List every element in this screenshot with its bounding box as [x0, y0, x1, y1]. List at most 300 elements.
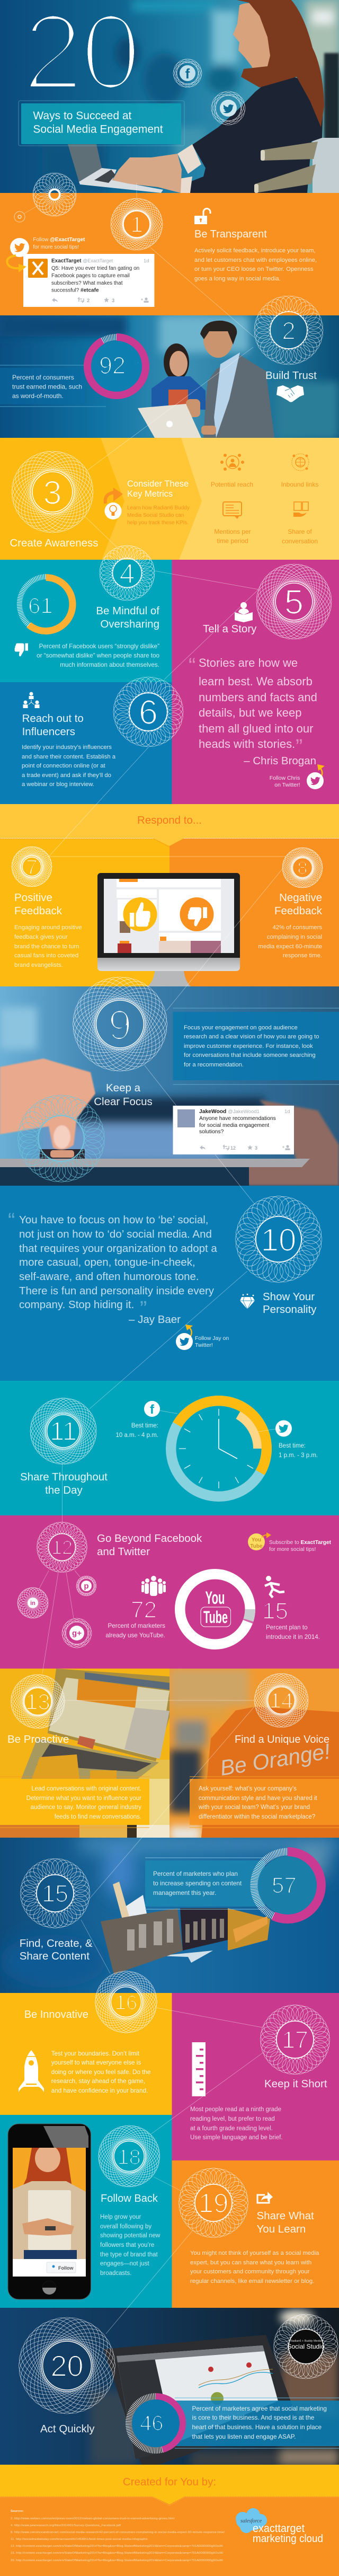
quote: chris brogan: Stories are how we — [199, 656, 298, 669]
tweet actions: 3 — [112, 298, 114, 304]
rosette number 7: 7 — [26, 857, 38, 879]
sources list: Sources: — [11, 2510, 24, 2513]
rosette number 4: 4 — [120, 559, 135, 589]
avatar: exacttarget — [28, 259, 48, 278]
tweet actions — [52, 297, 148, 304]
text box: content management: Percent of marketers who plan — [153, 1870, 238, 1877]
stat: 15%: introduce it in 2014. — [266, 1634, 320, 1640]
text box: focus body — [173, 1008, 339, 1084]
text: be transparent body: Actively solicit feedback, introduce your team, — [194, 248, 316, 254]
quote: chris brogan: details, but we keep — [199, 706, 301, 719]
text: share what you learn body: your customers and community through your — [190, 2269, 310, 2275]
text: positive feedback body: feedback gives your — [14, 934, 68, 940]
photo: blurred background — [0, 1007, 339, 1188]
rosette number 1: 1 — [130, 212, 143, 237]
text: percent of facebook users: much information about themselves. — [60, 661, 159, 668]
tweet text: for social media engagement — [199, 1123, 269, 1128]
connector lines between numbered rosettes — [39, 183, 286, 2334]
text: negative feedback body: complaining in social — [267, 934, 322, 940]
logo: salesforce exacttarget marketing cloud — [236, 2508, 323, 2545]
heading: find a unique voice: Find a Unique Voice — [235, 1734, 329, 1745]
rosette number 18: 18 — [117, 2146, 141, 2169]
quote: jay baer: not just on how to ‘do’ social media. And — [19, 1228, 212, 1240]
icon: thumbs down — [15, 643, 28, 656]
stat: 72%: already use YouTube. — [105, 1632, 165, 1639]
text: keep it short body: Use simple language and be brief. — [190, 2134, 283, 2141]
photo: right hand — [238, 1100, 339, 1186]
sources list: 11. http://socialmediatoday.com/briannasmith/1453951/best-times-post-social-media-infographic — [11, 2538, 148, 2541]
photo: hands on keyboard — [112, 154, 182, 193]
heading: share what you learn: Share What — [256, 2210, 314, 2222]
text box: unique voice body — [190, 1777, 339, 1828]
quote: chris brogan: them all glued into our — [199, 722, 313, 735]
clock chart: best times — [171, 1401, 266, 1496]
callout: subscribe on youtube — [248, 1532, 332, 1552]
metric: share of conversation — [282, 502, 318, 545]
monitor with facebook page — [97, 873, 240, 986]
text: learn how radian6: Learn how Radian6 Buddy — [127, 505, 190, 511]
rosette: around finger — [11, 1088, 112, 1189]
title text: Ways to Succeed at — [33, 110, 131, 122]
quote: jay baer: self-aware, and often humorous tone. — [19, 1271, 199, 1283]
text: follow back body: broadcasts. — [100, 2270, 131, 2277]
rosette number 1 — [101, 188, 173, 260]
rosette number 8 — [274, 840, 331, 896]
photo: hands — [186, 399, 216, 435]
text: learn how radian6: Media Social Studio can — [127, 513, 184, 518]
rosette number 5 — [242, 549, 339, 654]
tweet text: 1d — [144, 258, 149, 264]
text box: social marketing: Percent of marketers agree that social marketing — [192, 2405, 327, 2412]
text: percent of facebook users: Percent of Facebook users “strongly dislike” — [39, 643, 159, 650]
rosette number 3: 3 — [43, 474, 62, 511]
text box: unique voice body: with your social team? What’s your brand — [198, 1804, 310, 1811]
icon: rocket — [19, 2050, 44, 2092]
text box: be proactive body: Lead conversations with original content. — [31, 1786, 141, 1792]
decorative flower rosette — [14, 171, 78, 222]
tweet card: exacttarget — [23, 254, 154, 307]
heading: reach out to influencers: Influencers — [22, 726, 75, 738]
tweet text — [199, 1109, 290, 1135]
rosette number 14: 14 — [270, 1689, 293, 1713]
rosette number 19: 19 — [199, 2188, 228, 2218]
panel: respond to banner and feedback — [0, 804, 339, 986]
logo: salesforce exacttarget marketing cloud: marketing cloud — [253, 2533, 323, 2545]
text box: focus body: research and a clear vision of how you are going to — [184, 1034, 319, 1040]
phone follow bar: Follow — [58, 2265, 74, 2271]
photo: desk — [79, 1760, 170, 1838]
heading: build trust: Build Trust — [265, 369, 317, 382]
quote: jay baer: company. Stop hiding it. — [19, 1299, 134, 1311]
follow on twitter callout: Follow @ExactTarget — [33, 237, 85, 243]
sources list: 20. http://content.exacttarget.com/en/StateOfMarketing2014?ts=Blog&ss=Blog.StateofMarketing2014&lsm=Corporate&camp=701A0000000g9OuIAI — [11, 2559, 223, 2562]
rosette number 17 — [254, 1999, 336, 2080]
tweet card: jakewood — [173, 1106, 294, 1154]
heading: keep a clear focus: Clear Focus — [94, 1096, 153, 1108]
text box: focus body: for conversations that include someone searching — [184, 1052, 316, 1058]
panel: 14 find a unique voice — [170, 1663, 339, 1842]
photo: woman's jacket — [190, 76, 323, 193]
photo: woman's face — [233, 3, 270, 87]
sources list: 15. http://content.exacttarget.com/en/StateOfMarketing2014?ts=Blog&ss=Blog.StateofMarketing2014&lsm=Corporate&camp=701A0000000g9OuIAI — [11, 2552, 223, 2555]
attribution: jay baer: – Jay Baer — [129, 1313, 181, 1326]
heading: go beyond facebook and twitter: and Twitter — [97, 1546, 150, 1558]
icon: google plus rosette: g+ — [72, 1629, 82, 1638]
heading: be transparent: Be Transparent — [194, 228, 267, 240]
photo: man's suit — [203, 355, 274, 438]
photo: blurred background — [0, 1838, 339, 1988]
rosette number 10: 10 — [261, 1222, 296, 1258]
clock ticks and hands — [179, 1409, 253, 1488]
tweet text: JakeWood @JakeWood1 — [199, 1109, 260, 1115]
text: be transparent body: and let customers chat with employees online, — [194, 257, 317, 263]
donut chart: 46% — [129, 2396, 183, 2450]
metric: mentions per time period: Mentions per — [214, 528, 251, 535]
photo: blurred interior — [170, 1669, 249, 1842]
text: be transparent body: goes a long way in social media. — [194, 276, 281, 282]
follow chris on twitter: on Twitter! — [274, 782, 300, 788]
callout: facebook best time — [115, 1401, 177, 1439]
panel: 13 be proactive — [0, 1664, 170, 1838]
panel: 10 show your personality — [0, 1186, 339, 1381]
stat: 72% — [105, 1597, 166, 1639]
rosette number 5: 5 — [284, 583, 304, 621]
donut chart: 57% — [254, 1852, 321, 1919]
chevron: middle layer — [101, 438, 339, 560]
icon: diamond — [240, 1294, 255, 1309]
quote: chris brogan: learn best. We absorb — [199, 675, 313, 688]
text: negative feedback body: response time. — [283, 952, 322, 959]
heading: tell a story: Tell a Story — [203, 623, 257, 635]
text box: be proactive body: feeds to find new conversations. — [55, 1814, 141, 1820]
icon: linkedin rosette: in — [30, 1600, 35, 1607]
callout: facebook best time: f — [150, 1402, 155, 1417]
rosette: social studio: Radian6 + Buddy Media — [290, 2340, 322, 2343]
text: be innovative body: doing or where you feel safe. Do the — [51, 2069, 150, 2076]
text: follow back body: Help grow your — [100, 2214, 141, 2220]
rosette number 15: 15 — [42, 1880, 68, 1907]
youtube logo: You — [206, 1588, 225, 1608]
quote: chris brogan — [189, 654, 317, 758]
text: keep it short body: Most people read at a ninth grade — [190, 2106, 281, 2113]
heading: be innovative: Be Innovative — [24, 2009, 88, 2021]
donut chart: 92%: % — [127, 353, 139, 369]
text: be innovative body: Test your boundaries. Don’t limit — [51, 2050, 139, 2057]
sources list: 12. http://content.exacttarget.com/en/StateOfMarketing2014?ts=Blog&ss=Blog.StateofMarketing2014&lsm=Corporate&camp=701A0000000g9OuIAI — [11, 2545, 223, 2548]
follow chris on twitter: Follow Chris — [270, 775, 300, 781]
title text: Social Media Engagement — [33, 123, 163, 136]
follow jay on twitter — [176, 1333, 229, 1350]
photo: woman's head — [164, 343, 189, 381]
photo: woman's blazer — [151, 376, 206, 410]
tweet text: solutions? — [199, 1129, 224, 1135]
panel: hero photo header — [0, 0, 339, 193]
stat: 15%: 15 — [262, 1598, 288, 1624]
follow chris on twitter — [270, 772, 324, 789]
heading: go beyond facebook and twitter: Go Beyond Facebook — [97, 1532, 202, 1545]
donut chart: 92%: 92 — [99, 352, 126, 379]
stat: 72%: 72 — [131, 1597, 157, 1623]
metric: inbound links: Inbound links — [281, 481, 318, 488]
icon: linkedin rosette — [16, 1586, 49, 1619]
text box: be proactive body: audience to say. Monitor general industry — [31, 1804, 141, 1811]
photo: laptop keyboard and hands — [21, 1739, 159, 1781]
icon: thumbs down circle — [180, 897, 214, 931]
photo: sweater cuffs — [177, 144, 201, 193]
text box: be proactive body — [0, 1777, 149, 1828]
rosette number 9 — [55, 958, 185, 1090]
text: be innovative body: research, stay ahead of the game, — [51, 2078, 145, 2085]
quote: jay baer — [8, 1209, 217, 1320]
text box: focus body: improve customer experience. For instance, look — [184, 1043, 313, 1049]
metric: potential reach: Potential reach — [211, 481, 253, 488]
callout: subscribe on youtube: for more social tips! — [269, 1547, 316, 1552]
chevron: key metrics layer — [179, 438, 339, 560]
tweet text: Anyone have recommendations — [199, 1116, 276, 1122]
heading: keep it short: Keep it Short — [264, 2078, 327, 2090]
rosette number 6 — [108, 671, 189, 753]
heading: act quickly: Act Quickly — [40, 2423, 95, 2435]
panel: 20 act quickly — [0, 2298, 339, 2470]
panel: 12 go beyond facebook and twitter — [0, 1515, 339, 1669]
rosette number 20: 20 — [50, 2349, 84, 2383]
tweet text — [51, 258, 149, 294]
icon: ruler — [192, 2042, 206, 2096]
text box: social marketing: that lets you listen and engage ASAP. — [192, 2433, 296, 2440]
text: share what you learn body: You might not think of yourself as a social media — [190, 2250, 319, 2256]
heading: negative feedback: Negative — [279, 892, 322, 904]
logo: salesforce exacttarget marketing cloud: exacttarget — [253, 2522, 305, 2535]
banner: respond to: Respond to... — [137, 814, 202, 826]
rosette number 2: 2 — [282, 317, 296, 345]
metric: share of conversation: Share of — [288, 528, 312, 535]
rosette number 16 — [83, 1959, 169, 2045]
donut chart: 61%: % — [53, 595, 64, 609]
heading: follow back: Follow Back — [101, 2193, 158, 2204]
stat: 72%: Percent of marketers — [108, 1622, 165, 1629]
text: be innovative body: yourself to what everyone else is — [51, 2059, 141, 2066]
rosette number 14 — [244, 1663, 319, 1738]
icon: influencer network — [23, 692, 39, 708]
quote: jay baer: that requires your organization to adopt a — [19, 1242, 217, 1255]
text box: be proactive body: Determine what you want to influence your — [26, 1795, 141, 1802]
panel: 6 reach out to influencers — [0, 671, 189, 804]
metric: mentions per time period: time period — [217, 537, 248, 545]
tweet actions: 2 — [87, 298, 90, 304]
arrow: yellow curved to tweet — [7, 255, 26, 272]
quote: jay baer: ” — [140, 1297, 147, 1320]
text box: social marketing — [175, 2398, 339, 2448]
rosette number 10 — [228, 1189, 329, 1290]
stat: 15%: Percent plan to — [266, 1624, 308, 1631]
callout: subscribe on youtube: You — [252, 1537, 261, 1543]
icon: light bulb — [105, 502, 122, 519]
text box: focus body: Focus your engagement on good audience — [184, 1025, 298, 1031]
heading: show your personality: Show Your — [263, 1291, 315, 1303]
arrow: yellow curved up — [317, 764, 325, 777]
text: influencers body: point of connection online (or at — [22, 763, 105, 769]
phone follow bar — [13, 2259, 86, 2277]
rosette number 6: 6 — [139, 693, 158, 731]
quote: jay baer: more casual, open, tongue-in-cheek, — [19, 1256, 195, 1268]
text box: content management: to increase spending on content — [153, 1880, 242, 1887]
heading: create awareness: Create Awareness — [10, 537, 99, 549]
photo: laptop — [68, 144, 163, 193]
text: be transparent body: or turn your CEO loose on Twitter. Openness — [194, 266, 314, 272]
text: follow back body: engages—not just — [100, 2261, 150, 2267]
panel: 11 share throughout the day — [0, 1381, 339, 1515]
donut chart: 92% — [87, 337, 146, 395]
tweet actions: 12 — [230, 1145, 236, 1151]
text strip: percent of consumers: Percent of consumers — [12, 374, 74, 381]
photo: woman's auburn hair — [237, 0, 324, 127]
heading: be mindful of oversharing: Oversharing — [100, 618, 159, 630]
donut chart: 57%: 57 — [272, 1873, 297, 1898]
heading: find create share content: Share Content — [20, 1950, 90, 1962]
photo: clothespin and paper — [113, 1882, 213, 1963]
monitor chin and stand — [97, 958, 240, 986]
photo: dashboard screen — [117, 2345, 278, 2459]
tweet text: successful? #etcafe — [51, 288, 99, 294]
panel: 16 be innovative — [0, 1959, 172, 2115]
panel: 18 follow back — [0, 2113, 172, 2308]
heading: find create share content: Find, Create, & — [20, 1937, 93, 1949]
rosette: social studio: Social Studio — [287, 2343, 325, 2350]
photo: orange shirt — [201, 1707, 339, 1838]
stat: 15%: % — [286, 1600, 297, 1615]
callout: subscribe on youtube: Tube — [250, 1543, 263, 1549]
text: keep it short body: at a fourth grade reading level. — [190, 2125, 273, 2132]
rosette number 16: 16 — [115, 1992, 137, 2014]
text: positive feedback body: brand evangelists. — [14, 962, 63, 968]
stat: 72%: % — [155, 1599, 166, 1613]
attribution: chris brogan: – Chris Brogan — [244, 755, 316, 767]
tweet text: 1d — [284, 1109, 290, 1115]
rosette: social studio — [268, 2309, 339, 2384]
heading: share what you learn: You Learn — [256, 2223, 306, 2235]
metric: potential reach — [211, 454, 253, 488]
icon: facebook rosette: f — [185, 66, 190, 82]
photo: hanging group photos — [101, 1908, 270, 1974]
tweet text: Facebook pages to capture email — [51, 273, 130, 279]
avatar: jakewood — [177, 1109, 195, 1127]
photo: metal chair — [254, 142, 318, 193]
icon: pinterest rosette — [74, 1574, 99, 1598]
heading: reach out to influencers: Reach out to — [22, 712, 84, 725]
metric: mentions per time period — [214, 502, 251, 545]
text: learn how radian6: help you track these KPIs. — [127, 520, 189, 526]
heading: positive feedback: Feedback — [14, 905, 63, 917]
text: influencers body: and share their content. Establish a — [22, 754, 116, 760]
photo: bottom strip — [0, 1779, 170, 1838]
icon: share arrow — [257, 2192, 273, 2203]
photo: blurred cafe background — [42, 0, 339, 193]
quote: jay baer: You have to focus on how to ‘be’ social, — [19, 1214, 208, 1226]
tweet actions — [200, 1145, 290, 1151]
quote: jay baer: “ — [8, 1209, 15, 1232]
panel: 3 create awareness — [0, 435, 339, 560]
photo: pointing finger — [0, 1058, 95, 1150]
icon: reader with book — [235, 602, 253, 622]
quote: chris brogan: “ — [189, 654, 195, 677]
text: positive feedback body: brand the chance to turn — [14, 943, 79, 950]
banner: respond to — [0, 804, 339, 847]
banner: created for you by: Created for You by: — [123, 2476, 216, 2488]
callout: subscribe on youtube: Subscribe to ExactTarget — [269, 1540, 332, 1546]
callout: twitter best time — [258, 1421, 318, 1459]
donut chart: 46%: 46 — [140, 2412, 163, 2435]
metric: share of conversation: conversation — [282, 537, 318, 545]
panel: 2 build trust — [0, 290, 339, 440]
icon: facebook rosette — [170, 56, 205, 91]
callout: twitter best time: 1 p.m. - 3 p.m. — [279, 1452, 318, 1459]
photo: tablet edge — [0, 1149, 310, 1186]
heading: positive feedback: Positive — [14, 892, 52, 904]
sources list: 4. http://www.pewresearch.org/files/2014/01/Survey-Questions_Facebook.pdf — [11, 2524, 121, 2527]
phone home button — [42, 2281, 56, 2295]
heading: negative feedback: Feedback — [274, 905, 323, 917]
heading: share throughout the day: Share Throughout — [20, 1471, 108, 1483]
panel: 1 be transparent — [0, 171, 339, 315]
rosette number 8: 8 — [298, 858, 307, 878]
donut chart: 46%: % — [162, 2412, 173, 2426]
follow on twitter callout: for more social tips! — [33, 244, 79, 250]
photo: blurred lights and hands — [90, 2310, 339, 2467]
youtube logo: Tube — [203, 1608, 228, 1627]
follow jay on twitter: Twitter! — [195, 1342, 213, 1348]
panel: 5 tell a story — [172, 549, 339, 804]
rosette number 11 — [17, 1385, 110, 1477]
rosette number 13 — [0, 1664, 75, 1739]
heading: share throughout the day: the Day — [45, 1484, 83, 1496]
phone with follow screen — [8, 2124, 91, 2299]
text: negative feedback body: media expect 60-minute — [258, 943, 322, 950]
text: follow back body: showing potential new — [100, 2233, 160, 2239]
quote: chris brogan: numbers and facts and — [199, 691, 317, 704]
tweet text: subscribers? What makes that — [51, 280, 123, 286]
text: positive feedback body: Engaging around positive — [14, 924, 82, 931]
sources list: 2. http://www.nielsen.com/us/en/press-room/2012/nielsen-global-consumers-trust-in-earned-advertising-grows.html — [11, 2517, 174, 2520]
photo: man's shirt — [214, 352, 240, 438]
metric: inbound links — [281, 454, 318, 488]
tweet text: Q5: Have you ever tried fan gating on — [51, 266, 139, 271]
rosette number 3 — [0, 435, 109, 549]
text: influencers body: a trade event) and ask if they’ll do — [22, 772, 111, 779]
arrow: orange curved — [105, 488, 123, 504]
monitor screen — [104, 879, 234, 953]
text: share what you learn body: regular channels, like email newsletter or blog. — [190, 2278, 314, 2284]
heading: be mindful of oversharing: Be Mindful of — [96, 605, 159, 617]
icon: twitter rosette — [207, 87, 249, 129]
text box: unique voice body: differentiator within the social marketplace? — [199, 1814, 315, 1820]
photo: person seated right of chair — [324, 53, 339, 148]
rosette number 12: 12 — [51, 1537, 73, 1558]
text strip: percent of consumers: as word-of-mouth. — [12, 392, 64, 400]
text box: unique voice body: communication style and have you shared it — [199, 1795, 318, 1802]
panel: 17 keep it short — [172, 1993, 339, 2160]
panel: 4 be mindful of oversharing — [0, 541, 172, 682]
icon: pinterest rosette: p — [84, 1582, 89, 1591]
rosette number 2 — [248, 290, 329, 370]
photo: blurred city background — [0, 315, 339, 440]
icon: handshake — [276, 385, 304, 402]
photo: laptop — [138, 404, 201, 438]
icon: google plus rosette — [58, 1615, 95, 1652]
text box: content management — [145, 1858, 265, 1909]
text: percent of facebook users: or “somewhat dislike” when people share too — [37, 652, 159, 659]
donut chart: 61%: 61 — [28, 593, 53, 618]
rosette number 11: 11 — [50, 1417, 77, 1446]
